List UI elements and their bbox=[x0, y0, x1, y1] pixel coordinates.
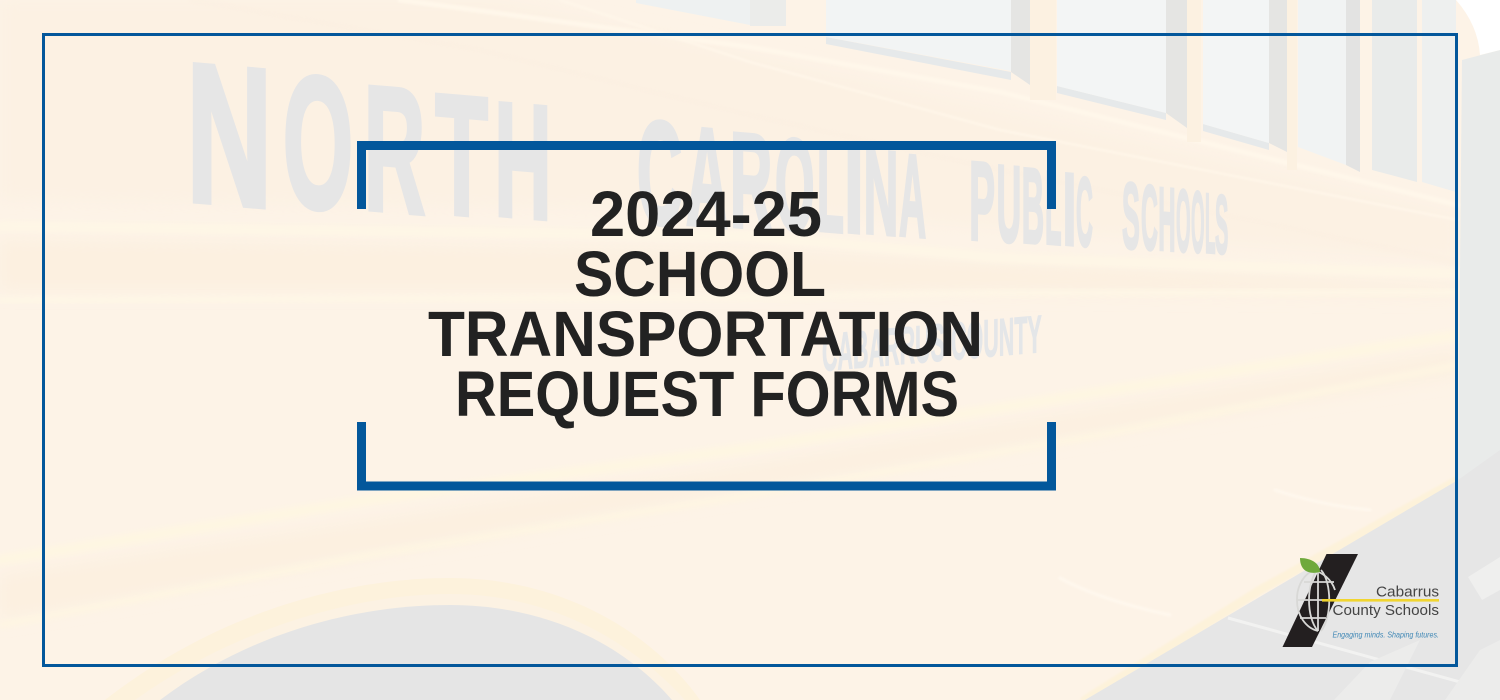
lettering on bus: NORTH CAROLINA PUBLIC SCHOOLS: P bbox=[969, 137, 995, 265]
lettering on bus: NORTH CAROLINA PUBLIC SCHOOLS: T bbox=[435, 58, 488, 253]
lettering on bus: NORTH CAROLINA PUBLIC SCHOOLS: C bbox=[637, 89, 682, 257]
lettering on bus: CABARRUS COUNTY: CABARRUS COUNTY bbox=[822, 304, 1042, 383]
wheel arch bbox=[105, 578, 700, 700]
title: TRANSPORTATION bbox=[428, 298, 983, 370]
lettering on bus: NORTH CAROLINA PUBLIC SCHOOLS: C bbox=[1141, 166, 1158, 271]
lettering on bus: NORTH CAROLINA PUBLIC SCHOOLS: I bbox=[1062, 153, 1076, 268]
lettering on bus: NORTH CAROLINA PUBLIC SCHOOLS: H bbox=[1158, 168, 1176, 270]
title: 2024-25 bbox=[590, 178, 822, 250]
lettering on bus: NORTH CAROLINA PUBLIC SCHOOLS: O bbox=[1191, 174, 1205, 272]
bus front and street bbox=[1085, 0, 1500, 700]
lettering on bus: NORTH CAROLINA PUBLIC SCHOOLS: N bbox=[864, 125, 898, 262]
lettering on bus: NORTH CAROLINA PUBLIC SCHOOLS: L bbox=[1205, 175, 1216, 271]
logo yellow line bbox=[1322, 599, 1439, 602]
lettering on bus: NORTH CAROLINA PUBLIC SCHOOLS bbox=[187, 23, 1228, 272]
lettering on bus: NORTH CAROLINA PUBLIC SCHOOLS: R bbox=[730, 105, 772, 259]
lettering on bus: NORTH CAROLINA PUBLIC SCHOOLS: A bbox=[899, 130, 926, 263]
title: REQUEST FORMS bbox=[455, 358, 959, 430]
lettering on bus: NORTH CAROLINA PUBLIC SCHOOLS: L bbox=[817, 118, 844, 260]
lettering on bus: NORTH CAROLINA PUBLIC SCHOOLS: O bbox=[1176, 170, 1191, 271]
lettering on bus: NORTH CAROLINA PUBLIC SCHOOLS: S bbox=[1215, 177, 1228, 272]
lettering on bus: NORTH CAROLINA PUBLIC SCHOOLS: N bbox=[187, 23, 272, 250]
logo name line 1: Cabarrus bbox=[1376, 584, 1439, 600]
lettering on bus: NORTH CAROLINA PUBLIC SCHOOLS: O bbox=[775, 111, 814, 259]
lettering on bus: NORTH CAROLINA PUBLIC SCHOOLS: R bbox=[364, 49, 425, 252]
lettering on bus: NORTH CAROLINA PUBLIC SCHOOLS: S bbox=[1122, 162, 1140, 269]
lettering on bus: NORTH CAROLINA PUBLIC SCHOOLS: I bbox=[844, 121, 864, 260]
title: SCHOOL bbox=[574, 238, 826, 310]
lettering on bus: NORTH CAROLINA PUBLIC SCHOOLS: B bbox=[1022, 146, 1044, 267]
logo name line 2: County Schools bbox=[1332, 602, 1439, 619]
logo: Cabarrus County Schools bbox=[1282, 554, 1439, 647]
bus windows bbox=[636, 0, 1456, 192]
lettering on bus: NORTH CAROLINA PUBLIC SCHOOLS: C bbox=[1076, 157, 1093, 268]
lettering on bus: NORTH CAROLINA PUBLIC SCHOOLS: U bbox=[997, 143, 1021, 267]
lettering on bus: NORTH CAROLINA PUBLIC SCHOOLS: L bbox=[1045, 150, 1061, 268]
logo tagline: Engaging minds. Shaping futures. bbox=[1332, 630, 1439, 640]
lettering on bus: NORTH CAROLINA PUBLIC SCHOOLS: H bbox=[494, 70, 551, 255]
top bracket bbox=[362, 146, 1052, 209]
title bbox=[428, 178, 983, 430]
lettering on bus: NORTH CAROLINA PUBLIC SCHOOLS: O bbox=[283, 36, 353, 251]
bottom bracket bbox=[362, 422, 1052, 486]
logo globe bbox=[1297, 569, 1335, 631]
logo leaf bbox=[1300, 558, 1320, 573]
logo slanted bar bbox=[1282, 554, 1358, 647]
lettering on bus: NORTH CAROLINA PUBLIC SCHOOLS: A bbox=[686, 97, 728, 258]
